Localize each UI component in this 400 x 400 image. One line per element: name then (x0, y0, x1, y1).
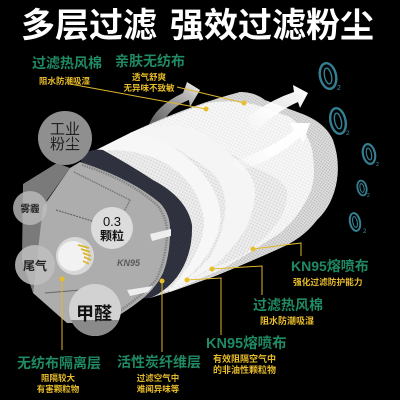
label: nonwoven barrier: 无纺布隔离层 (17, 355, 101, 371)
bubble: industrial dust (38, 111, 92, 165)
bubble: exhaust: 尾气 (23, 258, 47, 273)
bubble: haze: 雾霾 (20, 204, 40, 215)
label: hot-air cotton lower (253, 297, 323, 326)
label: nonwoven barrier (17, 355, 101, 394)
title: 强效过滤粉尘 (170, 7, 374, 45)
layer: mesh panel (180, 150, 287, 285)
label: activated carbon: 活性炭纤维层 (117, 354, 201, 370)
label: hot-air cotton lower: 过滤热风棉 (253, 297, 323, 313)
layer: navy activated carbon (80, 150, 192, 300)
O2 icons: 2 (363, 229, 367, 235)
leader dots (60, 100, 256, 284)
bubble: haze (13, 191, 47, 225)
bubble: exhaust (15, 245, 55, 285)
ear loop lower (127, 286, 153, 296)
O2 icons: 2 (367, 193, 370, 199)
label: skin-friendly nonwoven (115, 53, 185, 93)
label: KN95 melt-blown lower: 有效阻隔空气中 (213, 353, 276, 364)
grey front mask (22, 162, 171, 323)
mask filter layers (80, 92, 338, 300)
label: activated carbon (117, 354, 201, 394)
title (21, 7, 374, 45)
bubble: 0.3 micron particles: 0.3 (103, 214, 121, 229)
label: nonwoven barrier: 有害颗粒物 (37, 384, 80, 394)
bubble: industrial dust: 工业 (50, 121, 80, 138)
bubble: industrial dust: 粉尘 (50, 136, 80, 153)
O2 icons (317, 62, 379, 235)
KN95 mark: KN95 (117, 258, 141, 268)
O2 icons: 2 (346, 130, 350, 137)
label: nonwoven barrier: 阻隔较大 (41, 373, 75, 383)
O2 icons: 2 (376, 162, 379, 168)
layer: inner cotton (100, 140, 225, 293)
label: hot-air cotton top (32, 55, 102, 86)
label: KN95 melt-blown right: 强化过滤防护能力 (293, 276, 362, 287)
icon: exhalation valve (56, 237, 94, 275)
O2 icons: 2 (337, 85, 341, 92)
layer: front white (130, 126, 255, 292)
ear loop upper (150, 229, 171, 241)
label: KN95 melt-blown lower (206, 334, 287, 375)
label: hot-air cotton lower: 阻水防潮吸湿 (260, 315, 314, 326)
label: activated carbon: 难闻异味等 (137, 384, 180, 394)
arrows: airflow through mask (232, 85, 310, 172)
label: activated carbon: 过滤空气中 (137, 373, 179, 383)
title: 多层过滤 (21, 7, 157, 45)
layer: innermost white strip (80, 133, 220, 290)
layer: white hot-air cotton (130, 101, 314, 292)
bubble: formaldehyde: 甲醛 (76, 304, 112, 324)
bubble: 0.3 micron particles: 颗粒 (100, 228, 124, 243)
label: hot-air cotton top: 过滤热风棉 (32, 55, 102, 71)
label: KN95 melt-blown right (291, 258, 369, 287)
label: KN95 melt-blown right: KN95熔喷布 (291, 258, 369, 274)
label: skin-friendly nonwoven: 无异味不致敏 (123, 83, 175, 93)
label: skin-friendly nonwoven: 透气舒爽 (132, 72, 166, 82)
label: skin-friendly nonwoven: 亲肤无纺布 (115, 53, 185, 69)
bubble: formaldehyde (69, 284, 121, 336)
layer: back KN95 melt-blown (130, 92, 338, 298)
bubble: 0.3 micron particles (91, 207, 133, 249)
label: KN95 melt-blown lower: KN95熔喷布 (206, 334, 287, 352)
seam lines (74, 172, 130, 210)
arrow: airflow behind mask (148, 82, 200, 127)
label: KN95 melt-blown lower: 的非油性颗粒物 (213, 364, 276, 375)
label: hot-air cotton top: 阻水防潮吸湿 (39, 76, 91, 86)
leader lines (62, 84, 301, 352)
